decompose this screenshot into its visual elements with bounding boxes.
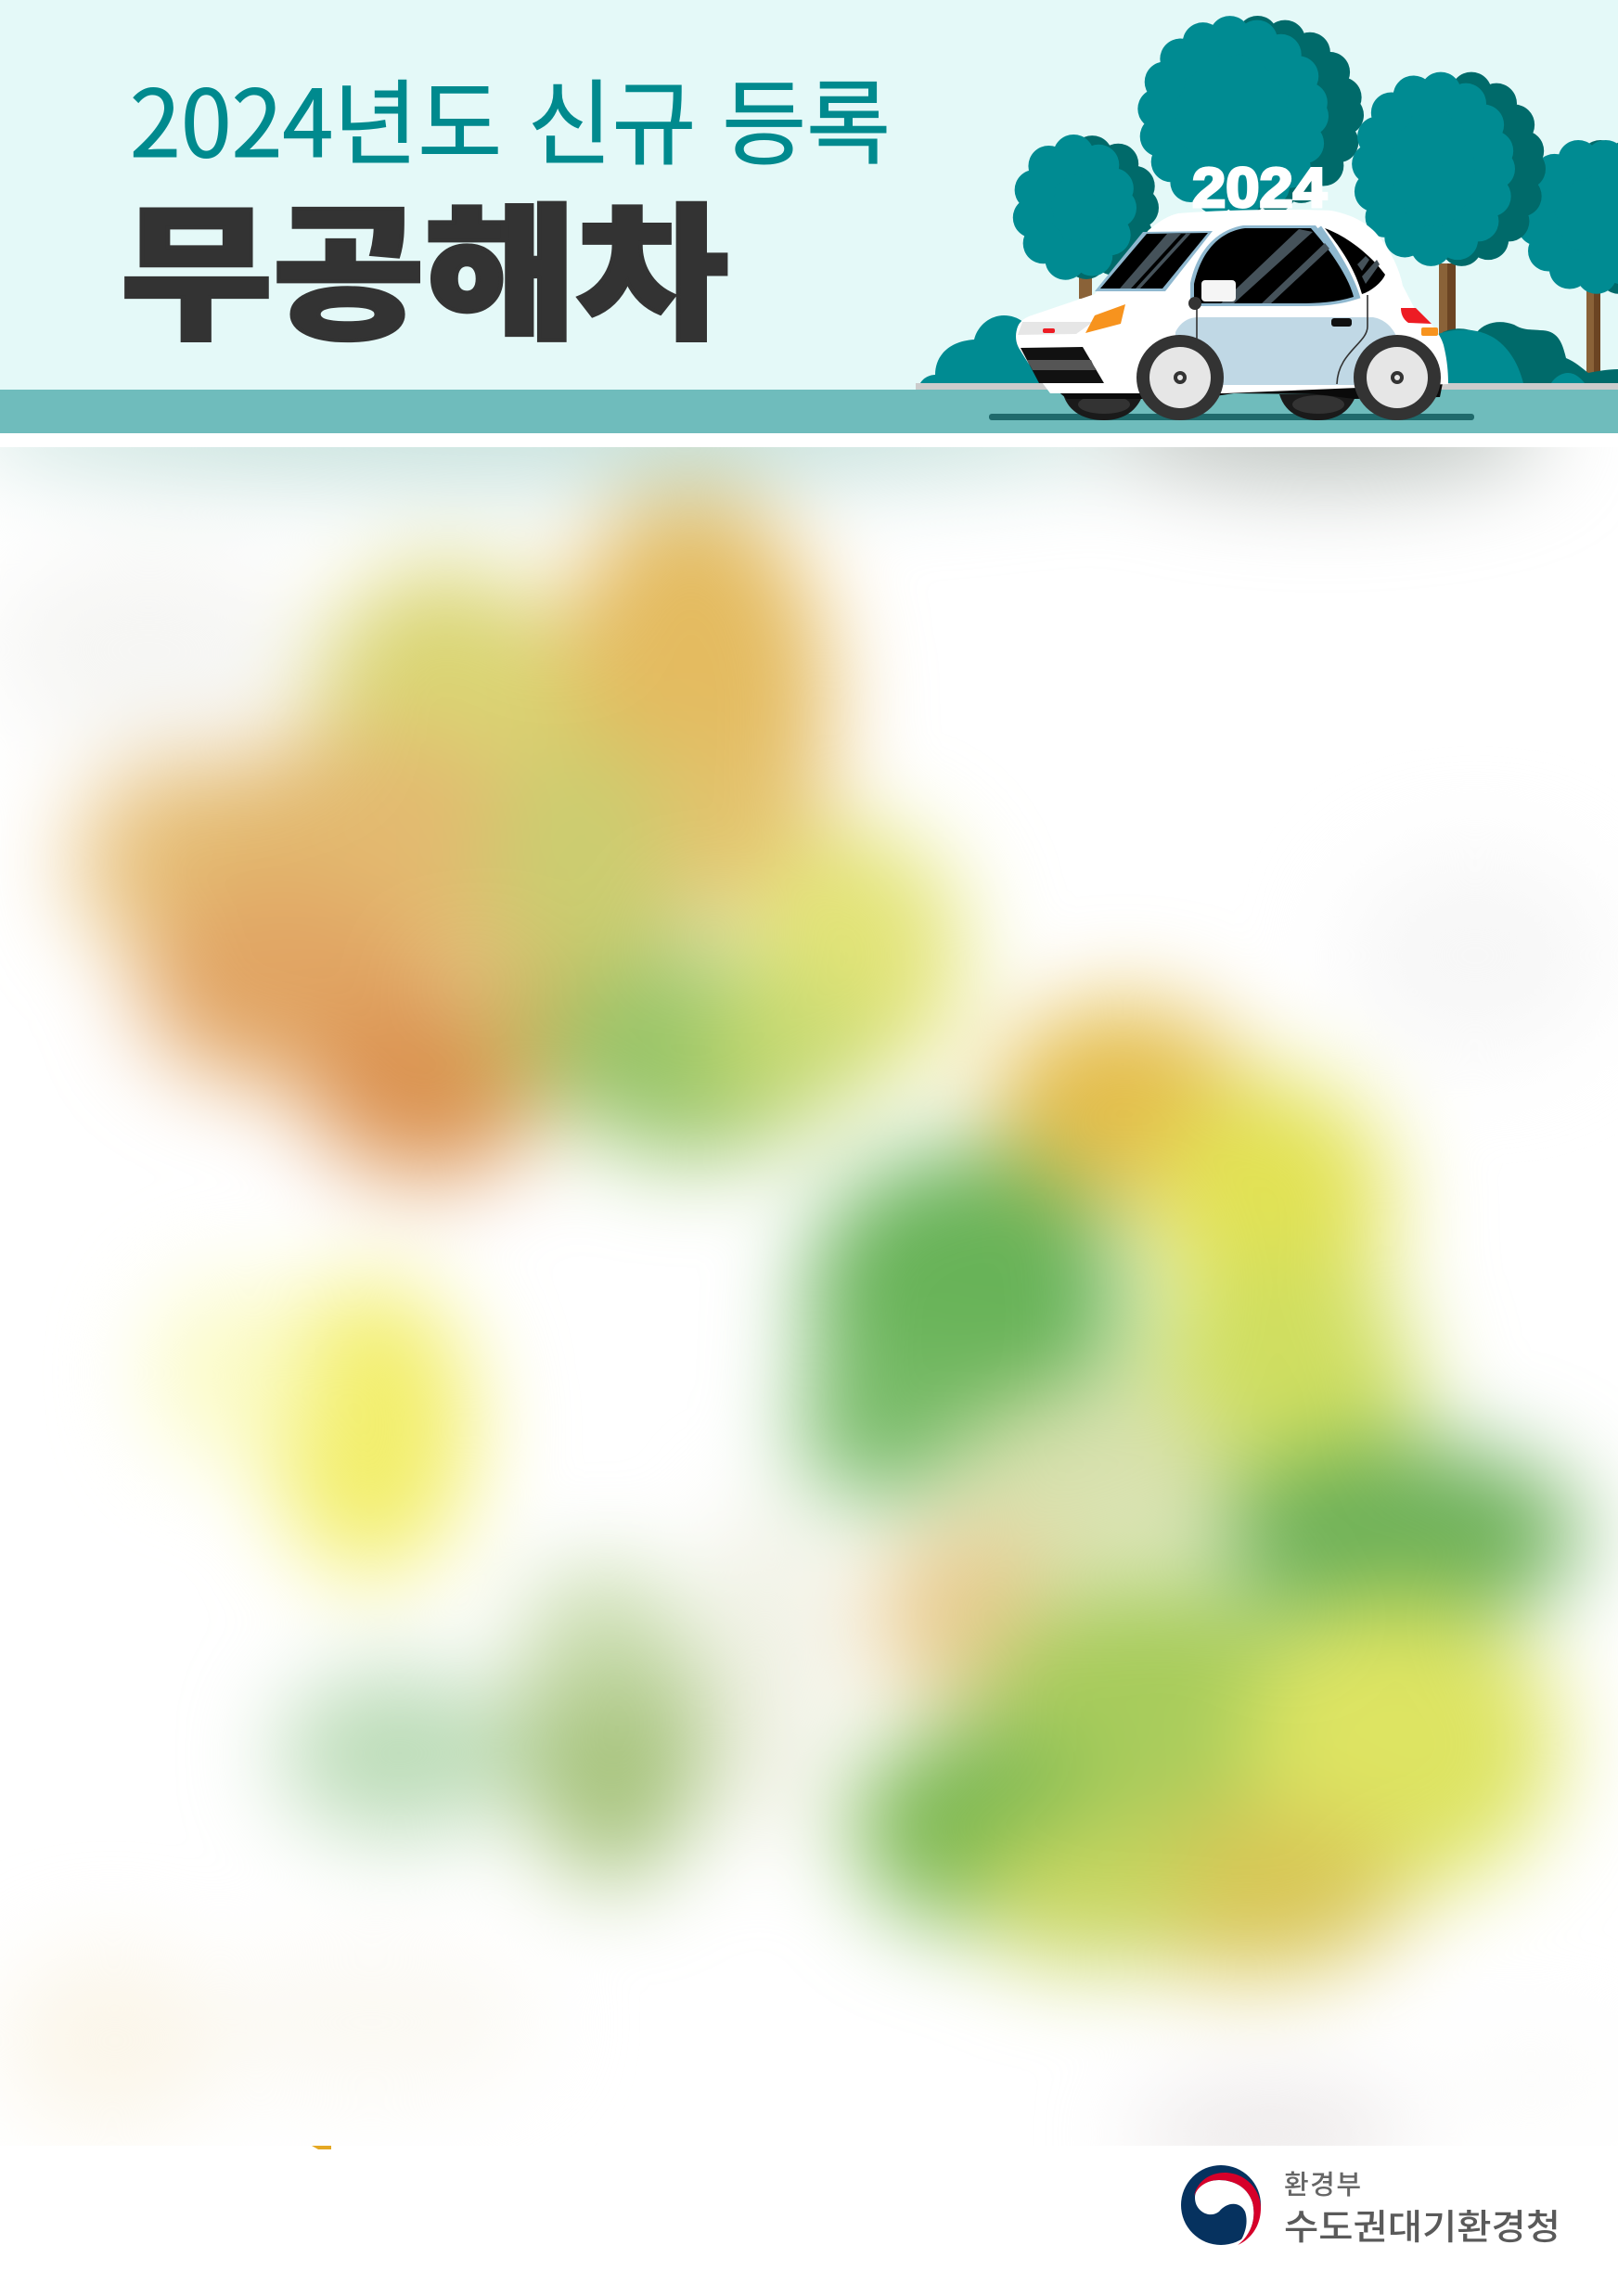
shadow under car [989, 414, 1474, 420]
icon: government taegeuk emblem [1181, 2165, 1261, 2245]
illustration: trees, bushes and car [920, 36, 1618, 420]
bushes: right [1438, 322, 1618, 383]
tree: right [1372, 92, 1525, 336]
orange fleck at blur edge [312, 2146, 331, 2149]
underbody [1050, 383, 1443, 399]
side window [1190, 225, 1358, 306]
text: agency name: 수도권대기환경청 [1284, 2199, 1560, 2250]
door panel [1175, 317, 1396, 385]
text: ministry name: 환경부 [1284, 2163, 1361, 2202]
car body [1016, 210, 1448, 393]
heading: 2024 new registrations: 2024년도 신규 등록 [130, 49, 891, 184]
footer: ministry logo [1181, 2163, 1560, 2250]
bush: left [920, 315, 1058, 383]
tail lights [1401, 308, 1438, 336]
rear wheel [1354, 335, 1441, 420]
tree: far right [1537, 159, 1618, 374]
front wheel [1136, 335, 1224, 420]
door handle [1331, 318, 1352, 327]
mirror [1188, 280, 1236, 310]
panel: blurred map area [0, 371, 1618, 2180]
curb [916, 383, 1618, 390]
title: zero emission vehicles: 무공해차 [121, 157, 728, 369]
tree: large centre [1158, 36, 1343, 196]
far-side wheels [1063, 394, 1356, 420]
headlight [1085, 304, 1125, 333]
road band [0, 390, 1618, 433]
panel: header banner [0, 0, 1618, 433]
front bumper panel [1018, 322, 1093, 335]
front grille [1021, 347, 1104, 383]
door outline [1197, 295, 1368, 384]
rear window [1325, 228, 1385, 294]
year label on car roof: 2024 [1192, 157, 1328, 219]
tree: left [1033, 155, 1138, 299]
windshield [1095, 231, 1213, 291]
